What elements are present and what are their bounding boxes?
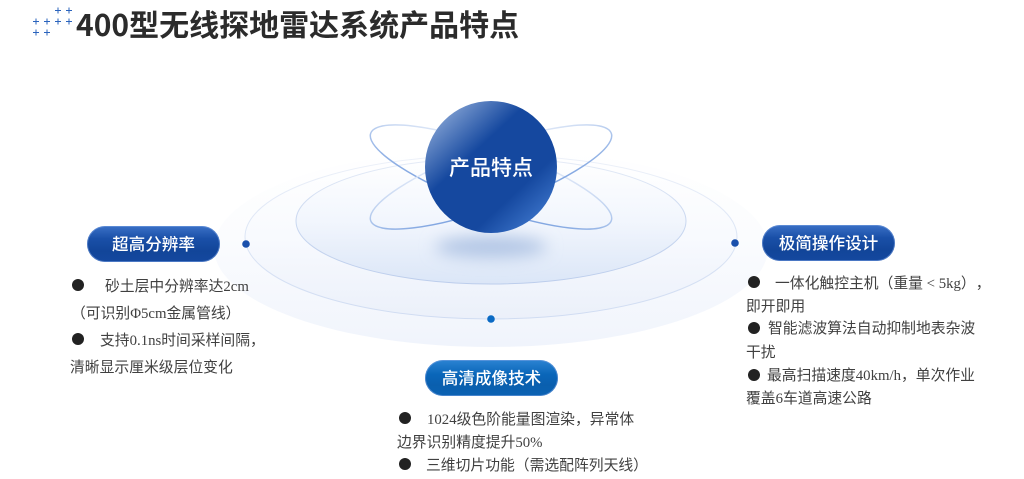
connector dot bottom	[487, 315, 495, 323]
text block: right: 即开即用	[746, 299, 805, 315]
pill heading: left: 超高分辨率	[112, 231, 195, 255]
text block: left: 砂土层中分辨率达2cm	[105, 279, 249, 295]
text block: left: 支持0.1ns时间采样间隔，	[100, 333, 265, 349]
text block: right: 智能滤波算法自动抑制地表杂波	[768, 321, 975, 337]
sphere label: 产品特点	[449, 152, 533, 182]
text block: bottom: 1024级色阶能量图渲染，异常体	[427, 412, 634, 428]
sphere	[425, 101, 557, 233]
sphere shadow	[435, 236, 547, 258]
title: 400型无线探地雷达系统产品特点	[76, 1, 519, 45]
text block: right: 最高扫描速度40km/h，单次作业	[767, 368, 975, 384]
text block: bottom: 三维切片功能（需选配阵列天线）	[426, 458, 648, 474]
text block: left	[70, 278, 265, 376]
connector dot left	[242, 240, 250, 248]
text block: right: 覆盖6车道高速公路	[746, 391, 872, 407]
pill heading: bottom: 高清成像技术	[442, 365, 541, 389]
text block: right: 一体化触控主机（重量 < 5kg），	[775, 276, 991, 292]
pill heading: left	[87, 226, 220, 262]
icon: plus dot pattern	[33, 8, 72, 36]
pill heading: right: 极简操作设计	[779, 230, 878, 254]
text block: right: 干扰	[746, 345, 776, 361]
text block: right	[746, 275, 991, 407]
pill heading: right	[762, 225, 895, 261]
orbit rings	[360, 105, 622, 249]
outer ellipse	[214, 149, 768, 347]
text block: left: （可识别Φ5cm金属管线）	[71, 306, 240, 322]
pill heading: bottom	[425, 360, 558, 396]
text block: bottom: 边界识别精度提升50%	[397, 435, 542, 451]
text block: left: 清晰显示厘米级层位变化	[70, 360, 233, 376]
text block: bottom	[397, 411, 648, 474]
middle ellipse	[245, 155, 737, 319]
connector dot right	[731, 239, 739, 247]
inner ellipse	[296, 158, 686, 284]
